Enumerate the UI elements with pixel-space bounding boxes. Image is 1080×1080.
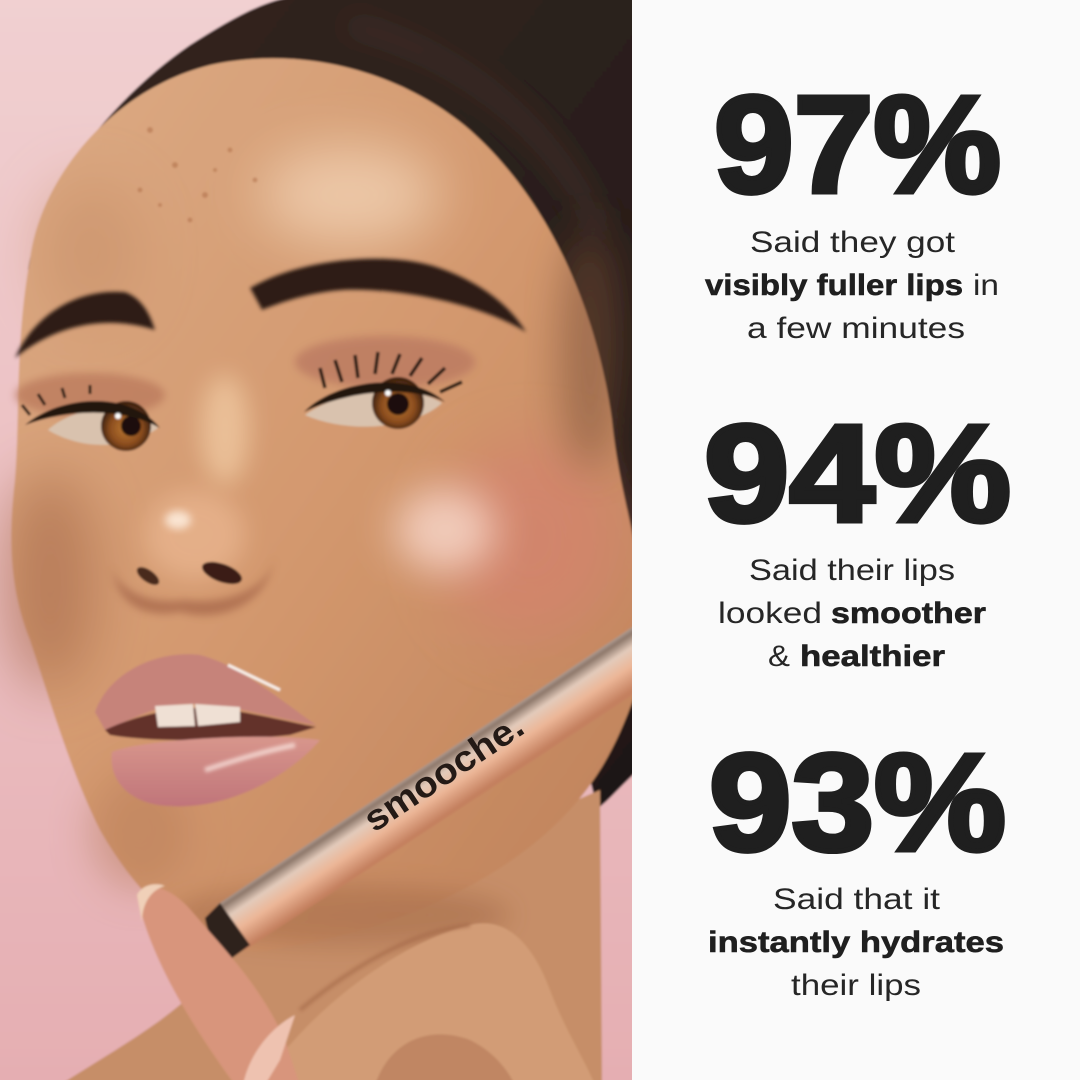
number 97%: 97% [714, 68, 1001, 222]
eyebrow left [15, 292, 155, 358]
description 94%: & [768, 640, 790, 673]
lips [95, 654, 320, 806]
description 94%: looked [718, 597, 822, 630]
description 97%: visibly fuller lips [705, 269, 963, 302]
hand and fingers [137, 884, 595, 1080]
description 94% [718, 554, 986, 673]
eyebrow right [250, 258, 526, 332]
eye right [304, 352, 462, 429]
number 94%: 94% [704, 397, 1011, 551]
photo: model holding lip product [0, 0, 650, 1080]
description 94%: Said their lips [749, 554, 955, 587]
nose [112, 490, 275, 615]
freckles [138, 127, 258, 222]
panel: stats background [632, 0, 1080, 1080]
eye left [22, 385, 160, 451]
lip product: smooche pen body [205, 622, 640, 958]
brand wordmark: smooche. [356, 704, 531, 840]
description 97%: a few minutes [747, 312, 965, 345]
description 94%: healthier [800, 640, 945, 673]
description 93%: Said that it [773, 883, 941, 916]
description 94%: smoother [831, 597, 986, 630]
description 97%: in [973, 269, 999, 302]
description 97%: Said they got [750, 226, 956, 259]
description 97% [705, 226, 999, 345]
description 93%: their lips [791, 969, 921, 1002]
stat block: 94% [704, 397, 1011, 673]
description 93%: instantly hydrates [708, 926, 1004, 959]
number 93%: 93% [709, 726, 1006, 880]
stat block: 97% [705, 68, 1001, 345]
stat block: 93% [708, 726, 1006, 1002]
description 93% [708, 883, 1004, 1002]
